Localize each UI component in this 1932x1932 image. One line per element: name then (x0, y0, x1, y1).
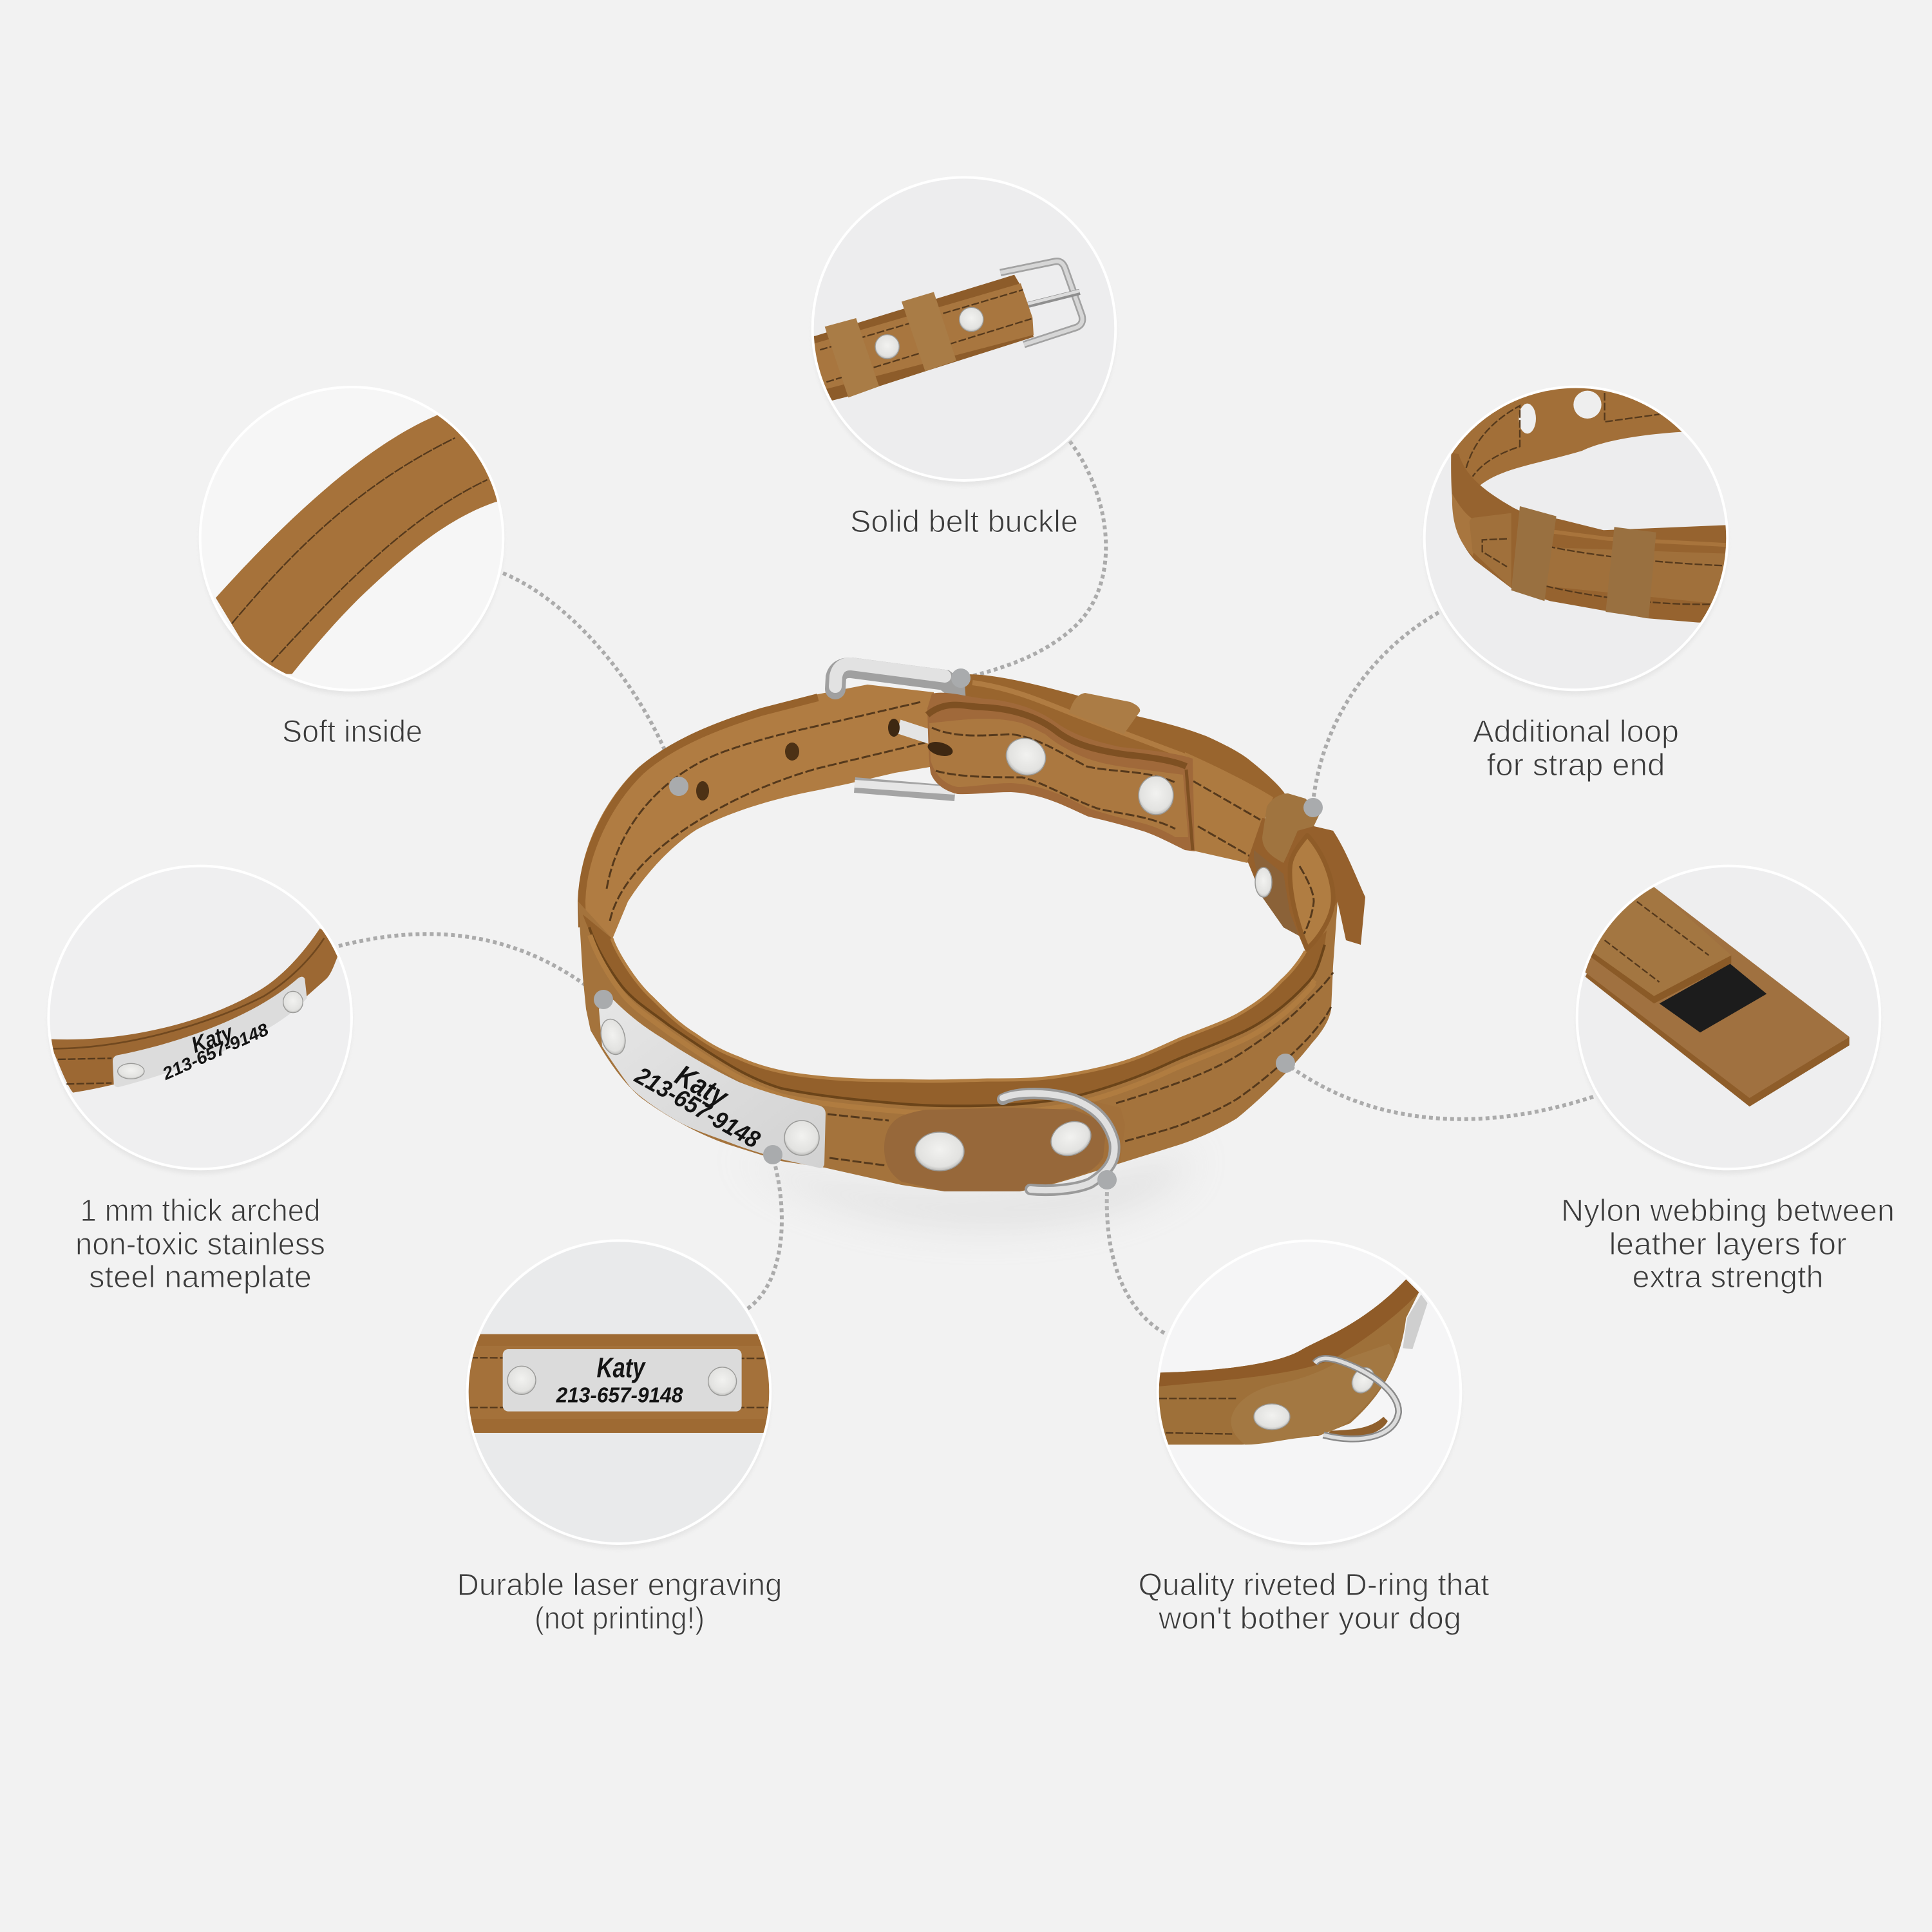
panel shadow (1158, 1245, 1461, 1549)
panel border (1158, 1241, 1461, 1544)
suede tongue through keeper (1290, 835, 1333, 949)
caption: additional loop: Additional loop (1473, 715, 1679, 749)
panel: soft inside detail (200, 387, 530, 695)
webbing strap artwork (1571, 863, 1850, 1106)
dotted connector: solid belt buckle (961, 441, 1106, 679)
caption: additional loop (1473, 715, 1679, 782)
D-ring (1003, 1094, 1115, 1190)
panel border (1425, 387, 1727, 690)
panel: laser engraving detail (466, 1240, 773, 1549)
marker dot: buckle (951, 668, 971, 688)
front band raised rim (583, 914, 1327, 1106)
upper tab layer beside D-ring (1082, 1099, 1125, 1166)
keeper area backing (1247, 818, 1338, 951)
engraved phone: 213-657-9148 (159, 1019, 272, 1084)
caption: D-ring: won't bother your dog (1158, 1602, 1461, 1636)
panel border (200, 387, 503, 690)
panel shadow (468, 1245, 770, 1549)
panel disc (1425, 387, 1727, 690)
buckle top bar (835, 664, 960, 692)
caption: nameplate: non-toxic stainless (75, 1227, 325, 1262)
panel shadow (1425, 392, 1727, 695)
left inner suede strap (578, 685, 934, 940)
loop strap artwork (1451, 382, 1732, 623)
panel disc (1158, 1241, 1461, 1544)
marker dot: laser engraving (763, 1145, 782, 1164)
D-ring artwork (1155, 1280, 1428, 1444)
panel border (1577, 866, 1880, 1169)
panel disc (1577, 866, 1880, 1169)
caption: nylon webbing: leather layers for (1609, 1227, 1847, 1262)
caption: nylon webbing: Nylon webbing between (1561, 1194, 1895, 1228)
front band stitching (828, 972, 1333, 1166)
panel border (813, 177, 1115, 480)
panel: arched nameplate detail (47, 866, 352, 1174)
panel: additional loop detail (1425, 382, 1732, 695)
wavy strap with rivets (926, 693, 1195, 851)
riveted D-ring tab (884, 1108, 1106, 1191)
caption: nameplate (75, 1194, 325, 1294)
engraved name: Katy (596, 1352, 646, 1383)
dotted connector: additional loop (1312, 612, 1439, 808)
marker dot: nylon webbing (1276, 1054, 1295, 1073)
stainless nameplate (597, 997, 826, 1168)
right back strap roll (964, 674, 1285, 802)
engraved phone: 213-657-9148 (556, 1383, 683, 1407)
caption: nameplate: steel nameplate (89, 1260, 312, 1294)
engraved phone number on collar: 213-657-9148 (630, 1062, 764, 1154)
caption: D-ring (1139, 1568, 1489, 1636)
panel disc (468, 1240, 770, 1544)
dotted connector: soft inside (503, 573, 679, 786)
rim edge highlight (612, 938, 1305, 1081)
main collar illustration (578, 664, 1365, 1224)
panel border (48, 866, 352, 1169)
panel disc (200, 387, 503, 690)
front outer band (578, 902, 1338, 1191)
marker dot: additional loop (1303, 798, 1323, 817)
panel shadow (48, 871, 352, 1174)
panel: solid belt buckle detail (807, 177, 1115, 486)
caption: D-ring: Quality riveted D-ring that (1139, 1568, 1489, 1602)
buckle strap artwork (807, 261, 1083, 404)
marker dot: D-ring (1097, 1170, 1117, 1189)
dotted connector: nylon webbing (1285, 1063, 1593, 1119)
panel disc (813, 177, 1115, 480)
suede strap artwork (216, 415, 497, 674)
caption: soft inside: Soft inside (282, 715, 422, 749)
caption: laser engraving (457, 1568, 782, 1636)
engraved name: Katy (188, 1019, 237, 1058)
collar shadow (741, 1153, 1191, 1224)
lighter lip below groove (590, 935, 1314, 1113)
caption: laser engraving: (not printing!) (535, 1602, 705, 1636)
panel: D-ring detail (1155, 1241, 1461, 1549)
caption: laser engraving: Durable laser engraving (457, 1568, 782, 1602)
panel shadow (813, 182, 1115, 486)
panel: nylon webbing detail (1571, 863, 1880, 1174)
panel border (468, 1240, 770, 1544)
lower keeper with rivet (1254, 850, 1299, 936)
right suede strap section (1185, 752, 1273, 863)
caption: solid belt buckle: Solid belt buckle (850, 505, 1078, 539)
first keeper loop (1069, 693, 1140, 734)
marker dot: soft inside (669, 777, 688, 796)
marker dot: nameplate (594, 990, 613, 1009)
caption: nylon webbing: extra strength (1632, 1260, 1824, 1294)
engraved name on collar: Katy (670, 1058, 735, 1114)
black nylon webbing (1660, 964, 1766, 1032)
panel shadow (200, 392, 503, 695)
dotted connector: nameplate (339, 934, 603, 999)
rim groove (589, 927, 1325, 1106)
caption: nameplate: 1 mm thick arched (80, 1194, 321, 1228)
caption: nylon webbing (1561, 1194, 1895, 1294)
dotted connector: D-ring (1107, 1180, 1164, 1333)
buckle lower bar (855, 784, 955, 793)
strap end tail (1312, 826, 1365, 945)
engraved plate artwork (466, 1334, 773, 1433)
right keeper dome (1262, 793, 1320, 863)
panel shadow (1577, 871, 1880, 1174)
nameplate artwork (47, 929, 343, 1093)
caption: additional loop: for strap end (1486, 748, 1665, 782)
dotted connector: laser engraving (748, 1154, 782, 1309)
panel disc (48, 866, 352, 1169)
buckle tongue (888, 719, 934, 738)
